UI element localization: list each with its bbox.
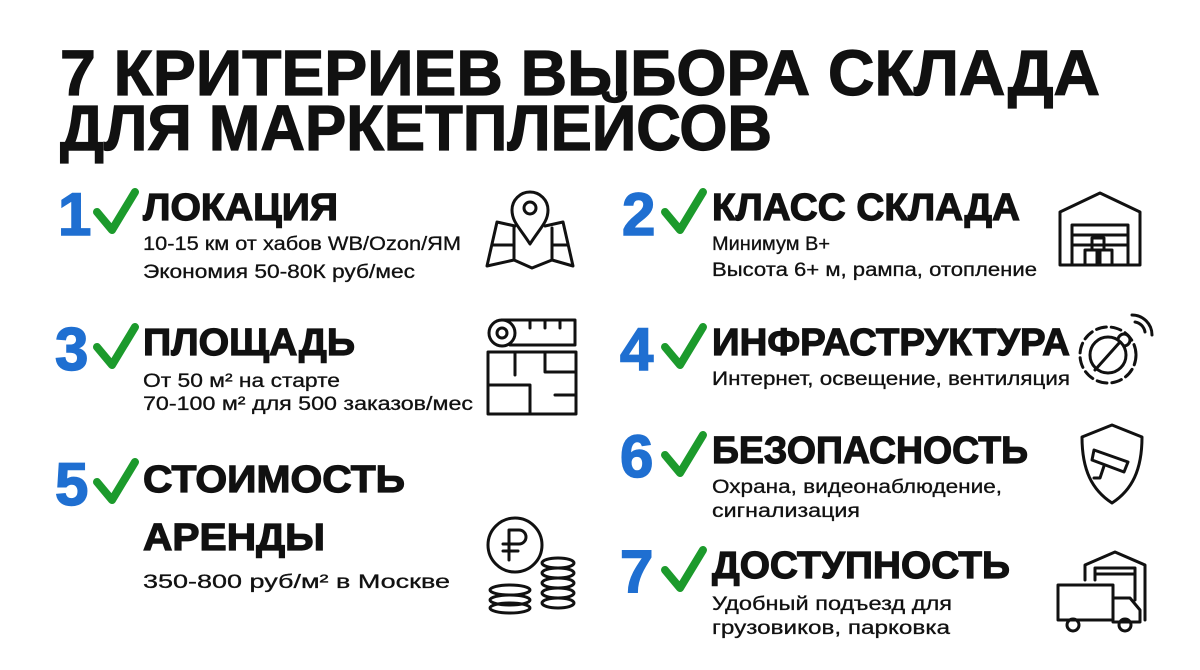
item 6: security: сигнализация: [712, 501, 860, 522]
item 5: rent cost: 5: [55, 451, 88, 518]
item 3: area: 3: [55, 316, 88, 383]
icon: warehouse: [1060, 193, 1140, 265]
item 4: infrastructure: ИНФРАСТРУКТУРА: [712, 322, 1070, 364]
item 5: rent cost: [55, 451, 574, 613]
item 1: location: [58, 181, 573, 283]
item 6: security: [620, 423, 1142, 522]
item 6: security: БЕЗОПАСНОСТЬ: [712, 430, 1028, 472]
item 5: rent cost: АРЕНДЫ: [143, 517, 325, 559]
title: 7 КРИТЕРИЕВ ВЫБОРА СКЛАДА: [60, 37, 1100, 109]
icon: truck at warehouse: [1058, 552, 1145, 631]
item 2: warehouse class: КЛАСС СКЛАДА: [712, 187, 1020, 229]
item 5: rent cost: СТОИМОСТЬ: [143, 459, 405, 501]
icon: floor plan with tape: [488, 320, 576, 414]
icon: gear with wrench: [1080, 315, 1152, 383]
title: [60, 37, 1100, 164]
item 3: area: От 50 м² на старте: [143, 371, 340, 392]
item 7: accessibility: Удобный подъезд для: [712, 594, 952, 615]
item 1: location: ЛОКАЦИЯ: [143, 187, 338, 229]
item 4: infrastructure: Интернет, освещение, вентиляция: [712, 369, 1070, 390]
icon: shield camera: [1082, 425, 1142, 503]
item 3: area: [55, 316, 576, 415]
item 7: accessibility: грузовиков, парковка: [712, 618, 951, 639]
item 4: infrastructure: 4: [620, 316, 654, 383]
item 1: location: 1: [58, 181, 91, 248]
item 3: area: 70-100 м² для 500 заказов/мес: [143, 394, 473, 415]
item 2: warehouse class: [622, 181, 1140, 281]
item 5: rent cost: 350-800 руб/м² в Москве: [143, 572, 450, 593]
item 4: infrastructure: [620, 315, 1152, 390]
item 1: location: 10-15 км от хабов WB/Ozon/ЯМ: [143, 234, 461, 255]
icon: map pin: [487, 192, 573, 268]
item 2: warehouse class: Минимум В+: [712, 234, 830, 255]
item 7: accessibility: [620, 538, 1145, 639]
item 7: accessibility: ДОСТУПНОСТЬ: [712, 545, 1010, 587]
item 6: security: 6: [620, 423, 653, 490]
item 2: warehouse class: 2: [622, 181, 655, 248]
title: ДЛЯ МАРКЕТПЛЕЙСОВ: [60, 91, 772, 164]
item 3: area: ПЛОЩАДЬ: [143, 322, 355, 364]
item 1: location: Экономия 50-80К руб/мес: [143, 262, 415, 283]
item 6: security: Охрана, видеонаблюдение,: [712, 477, 1002, 498]
item 7: accessibility: 7: [620, 538, 653, 605]
item 2: warehouse class: Высота 6+ м, рампа, отопление: [712, 260, 1037, 281]
icon: ruble coins: [488, 518, 574, 613]
